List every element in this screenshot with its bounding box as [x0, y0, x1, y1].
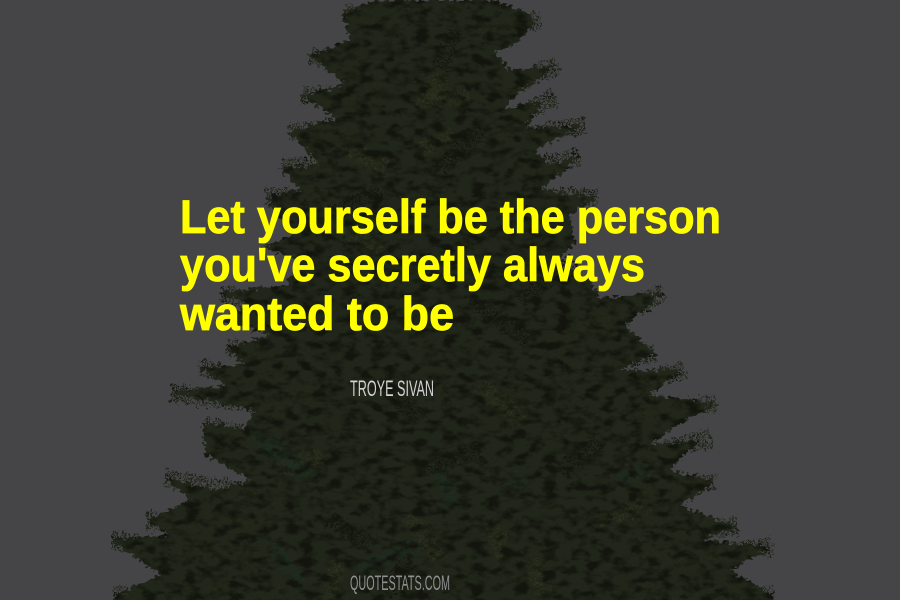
needle highlights — [255, 30, 650, 600]
quote line 2: you've secretly always — [180, 238, 645, 291]
quote line 3: wanted to be — [179, 287, 454, 340]
author name: TROYE SIVAN — [350, 376, 434, 401]
branch tips — [111, 12, 775, 595]
source watermark: QUOTESTATS.COM — [350, 572, 450, 595]
tree illustration — [111, 0, 775, 600]
tree body — [111, 0, 775, 600]
quote line 1: Let yourself be the person — [180, 190, 721, 243]
quote text — [179, 190, 721, 340]
